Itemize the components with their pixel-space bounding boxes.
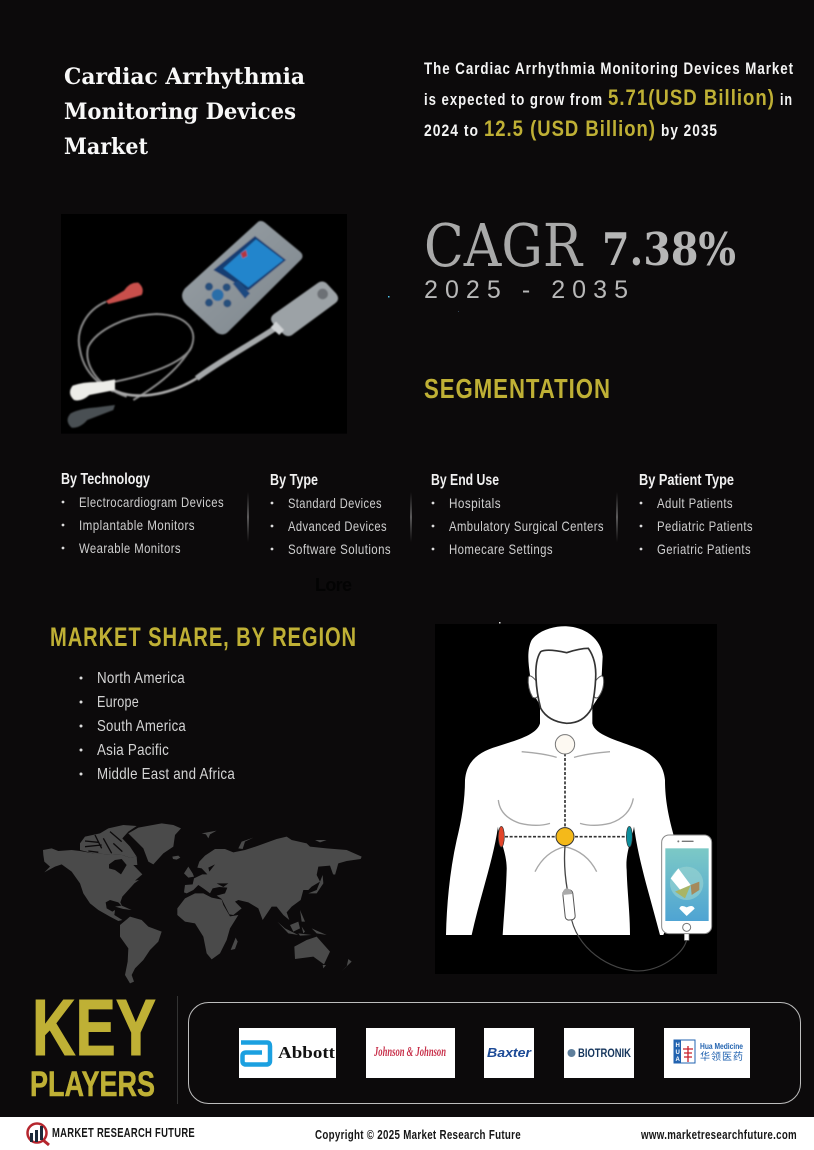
region list: Middle East and Africa	[97, 766, 235, 783]
column: by end use	[431, 472, 604, 557]
title: Cardiac Arrhythmia	[64, 64, 305, 90]
market growth summary: is expected to grow from	[424, 91, 603, 109]
logo: Biotronik: BIOTRONIK	[578, 1046, 631, 1060]
column: by type: Standard Devices	[288, 495, 382, 511]
market growth summary: by 2035	[661, 122, 718, 140]
column: by patient type: By Patient Type	[639, 472, 734, 489]
stray specks	[388, 296, 500, 624]
red electrode	[498, 826, 504, 847]
region list: South America	[97, 718, 186, 735]
lead wire and recorder	[562, 846, 687, 971]
column: by type: Software Solutions	[288, 541, 391, 557]
market growth summary: 12.5 (USD Billion)	[484, 116, 656, 141]
centre electrode	[556, 828, 574, 846]
region list: Asia Pacific	[97, 742, 169, 759]
hairline and jaw	[536, 648, 596, 723]
region list	[80, 670, 235, 783]
footer bar	[0, 1117, 814, 1150]
title: Monitoring Devices	[64, 99, 296, 125]
title: Market	[64, 134, 149, 160]
image: body with ECG electrodes and phone	[435, 624, 717, 974]
key players heading: KEY	[32, 983, 156, 1072]
column: by technology: Electrocardiogram Devices	[79, 494, 224, 510]
key players heading	[30, 983, 156, 1104]
footer bar: Copyright © 2025 Market Research Future	[315, 1127, 521, 1142]
world map	[43, 823, 362, 983]
logo: Hua Medicine	[664, 1028, 750, 1078]
faint stray text: Lore	[315, 575, 352, 595]
black electrode	[68, 405, 115, 428]
market growth summary: in	[780, 91, 793, 109]
column: by end use: Ambulatory Surgical Centers	[449, 518, 604, 534]
key players panel	[188, 1002, 800, 1104]
smartphone	[662, 835, 712, 940]
americas and greenland	[43, 823, 181, 983]
column: by patient type: Pediatric Patients	[657, 518, 753, 534]
column: by technology: Wearable Monitors	[79, 540, 181, 556]
column: by end use: By End Use	[431, 472, 499, 489]
white electrode	[70, 379, 115, 400]
column: by patient type	[639, 472, 753, 557]
logo: Hua Medicine: H	[676, 1043, 680, 1049]
market growth summary: 2024 to	[424, 122, 479, 140]
column: by end use: Hospitals	[449, 495, 501, 511]
market growth summary: 5.71(USD Billion)	[608, 85, 775, 110]
region list: Europe	[97, 694, 139, 711]
body silhouette	[446, 626, 683, 935]
column: by technology	[61, 471, 224, 556]
logo: Abbott: Abbott	[278, 1043, 335, 1062]
teal electrode	[626, 826, 632, 847]
logo: Hua Medicine: A	[676, 1057, 680, 1063]
logo: Hua Medicine: Hua Medicine	[700, 1042, 743, 1051]
logo: Biotronik	[564, 1028, 634, 1078]
logo: Hua Medicine: 华领医药	[700, 1048, 743, 1063]
column: by type: Advanced Devices	[288, 518, 387, 534]
region list: North America	[97, 670, 185, 687]
key players heading: PLAYERS	[30, 1065, 155, 1104]
column: by patient type: Adult Patients	[657, 495, 733, 511]
column: by technology: By Technology	[61, 471, 150, 488]
logo: Hua Medicine: U	[676, 1050, 680, 1056]
footer logo	[28, 1124, 49, 1145]
footer bar: MARKET RESEARCH FUTURE	[52, 1125, 195, 1140]
CAGR figure	[424, 211, 736, 304]
market growth summary	[424, 60, 794, 141]
column: by end use: Homecare Settings	[449, 541, 553, 557]
logo: Abbott	[239, 1028, 336, 1078]
market share heading: MARKET SHARE, BY REGION	[50, 622, 357, 652]
column: by type: By Type	[270, 472, 318, 489]
CAGR figure: 2025 - 2035	[424, 276, 628, 304]
logo: Baxter	[484, 1028, 534, 1078]
ears	[528, 676, 604, 698]
CAGR figure: CAGR	[424, 211, 583, 280]
eurasia, africa and oceania	[177, 831, 362, 971]
CAGR figure: 7.38%	[602, 223, 736, 276]
segmentation heading: SEGMENTATION	[424, 373, 611, 404]
image: ECG monitoring device	[61, 214, 347, 434]
sensor unit	[271, 281, 338, 336]
column: by patient type: Geriatric Patients	[657, 541, 751, 557]
logo: Johnson & Johnson: Johnson & Johnson	[373, 1045, 446, 1060]
logo: Baxter: Baxter	[487, 1045, 532, 1060]
title	[64, 64, 305, 160]
red electrode	[106, 283, 143, 304]
neck electrode	[555, 735, 575, 754]
column: by technology: Implantable Monitors	[79, 517, 195, 533]
column: by type	[270, 472, 391, 557]
handheld monitor	[182, 221, 302, 334]
logo: Johnson & Johnson	[366, 1028, 455, 1078]
